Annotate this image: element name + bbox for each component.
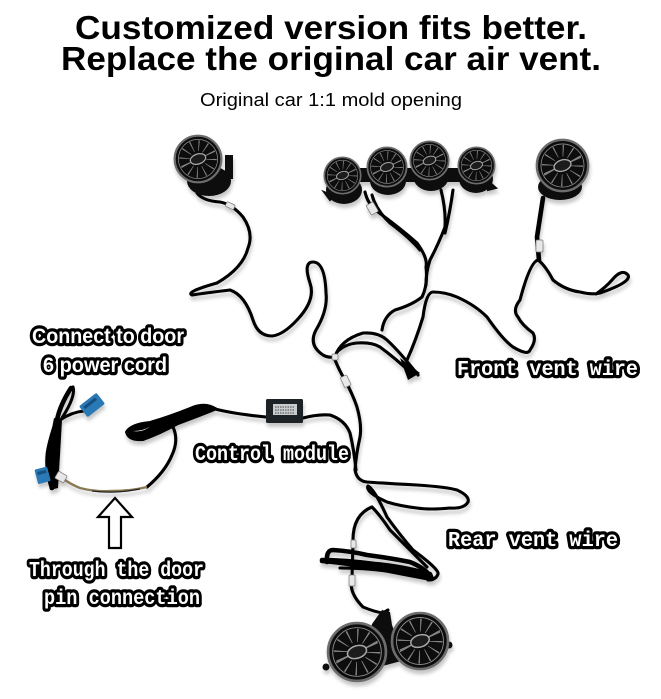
wire: rear triangle: [353, 507, 427, 567]
wire: left front vent: [191, 193, 335, 357]
wire: control module input and thick loop: [126, 405, 266, 487]
label: through the door pin connection: Through the door: [29, 560, 204, 583]
title: Replace the original car air vent.: [61, 40, 601, 77]
subtitle: Original car 1:1 mold opening: [200, 90, 462, 110]
wire: rear vent stem: [351, 543, 388, 613]
title: Customized version fits better.: [75, 9, 587, 46]
control module: [266, 399, 303, 423]
connector: blue plug top: [79, 393, 105, 417]
title: [61, 9, 601, 77]
label: through the door pin connection: [29, 560, 204, 611]
wire: junction loops: [335, 333, 420, 380]
connector: white clip: [55, 471, 67, 483]
label: control module: Control module: [195, 444, 349, 467]
label: front vent wire: Front vent wire: [457, 359, 638, 382]
arrow: up to door pin cable: [98, 498, 132, 548]
connectors: [225, 201, 543, 586]
wire: door harness: [46, 387, 84, 490]
wire: door pin tan cable: [62, 478, 147, 492]
wire: module to trunk: [303, 415, 356, 470]
vent cluster: four centre vents: [324, 141, 496, 204]
label: through the door pin connection: pin connection: [44, 588, 200, 611]
label: rear vent wire: Rear vent wire: [448, 530, 618, 553]
connector: blue plug bottom: [34, 466, 51, 484]
wiring diagram: [34, 136, 628, 681]
label: connect to door: [32, 325, 184, 377]
wire: right front vent: [407, 260, 628, 360]
wire: main trunk: [335, 360, 468, 580]
label: connect to door: 6 power cord: [43, 354, 167, 377]
wire: centre vents bundle: [365, 190, 453, 330]
vent: top right: [537, 140, 588, 200]
label: connect to door: Connect to door: [32, 325, 184, 348]
vent: top left: [175, 136, 233, 196]
vent pair: rear: [322, 610, 452, 681]
wire: right vent stem: [537, 198, 543, 260]
wire: rear bundle: [322, 550, 432, 579]
